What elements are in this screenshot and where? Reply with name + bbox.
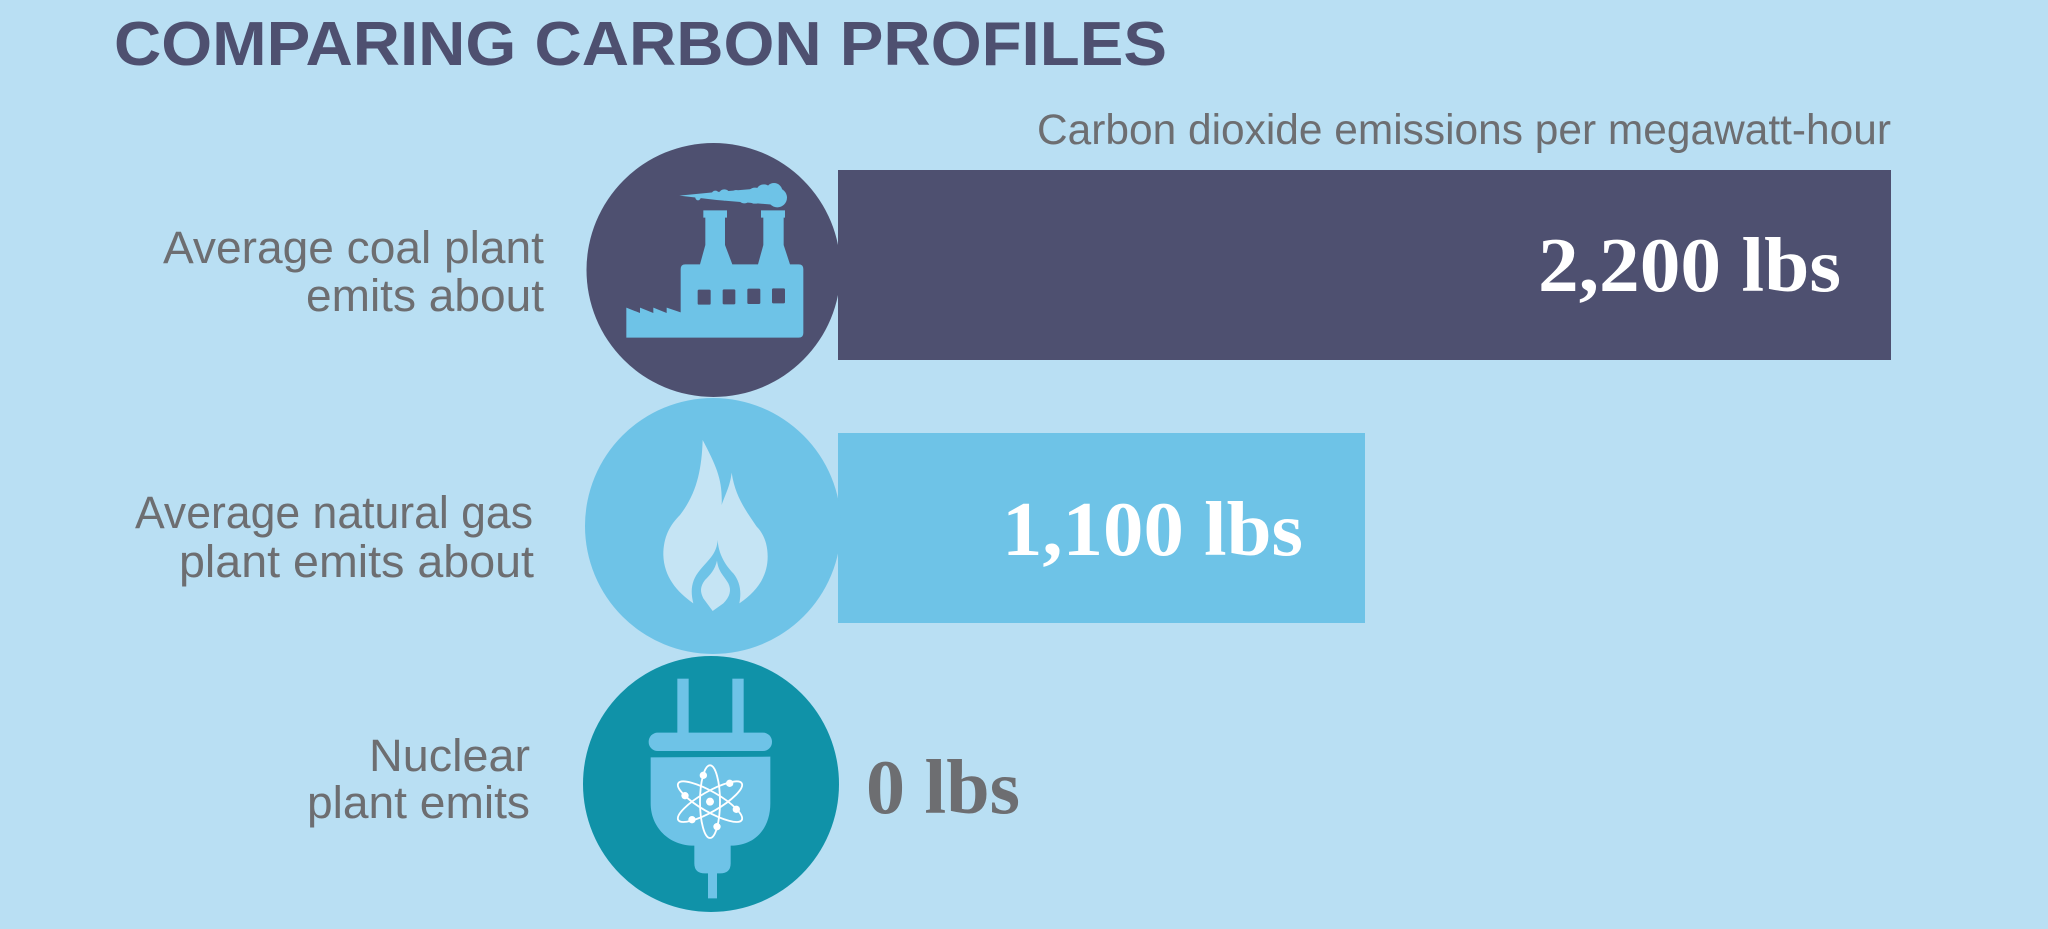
label: natural gas: plant emits about	[179, 536, 535, 587]
row: nuclear plant	[307, 656, 1020, 912]
label: nuclear: plant emits	[307, 777, 530, 828]
label: coal: emits about	[306, 270, 545, 321]
row: coal plant	[163, 143, 1891, 397]
icon: plug with atom	[583, 656, 839, 912]
label: natural gas	[135, 487, 535, 587]
bar: coal	[838, 170, 1891, 360]
label: coal	[163, 222, 545, 321]
bar: natural gas	[838, 433, 1365, 623]
title: COMPARING CARBON PROFILES	[114, 10, 1167, 79]
icon: flame	[585, 398, 841, 654]
label: nuclear: Nuclear	[369, 730, 530, 781]
icon: factory	[586, 143, 840, 397]
value: natural gas: 1,100 lbs	[1002, 486, 1303, 572]
value: coal: 2,200 lbs	[1538, 222, 1841, 308]
label: coal: Average coal plant	[163, 222, 545, 273]
label: natural gas: Average natural gas	[135, 487, 533, 538]
row: natural gas plant	[135, 398, 1365, 654]
value: nuclear: 0 lbs	[866, 744, 1020, 830]
chart subtitle: Carbon dioxide emissions per megawatt-hour	[1037, 106, 1891, 154]
label: nuclear	[307, 730, 530, 828]
